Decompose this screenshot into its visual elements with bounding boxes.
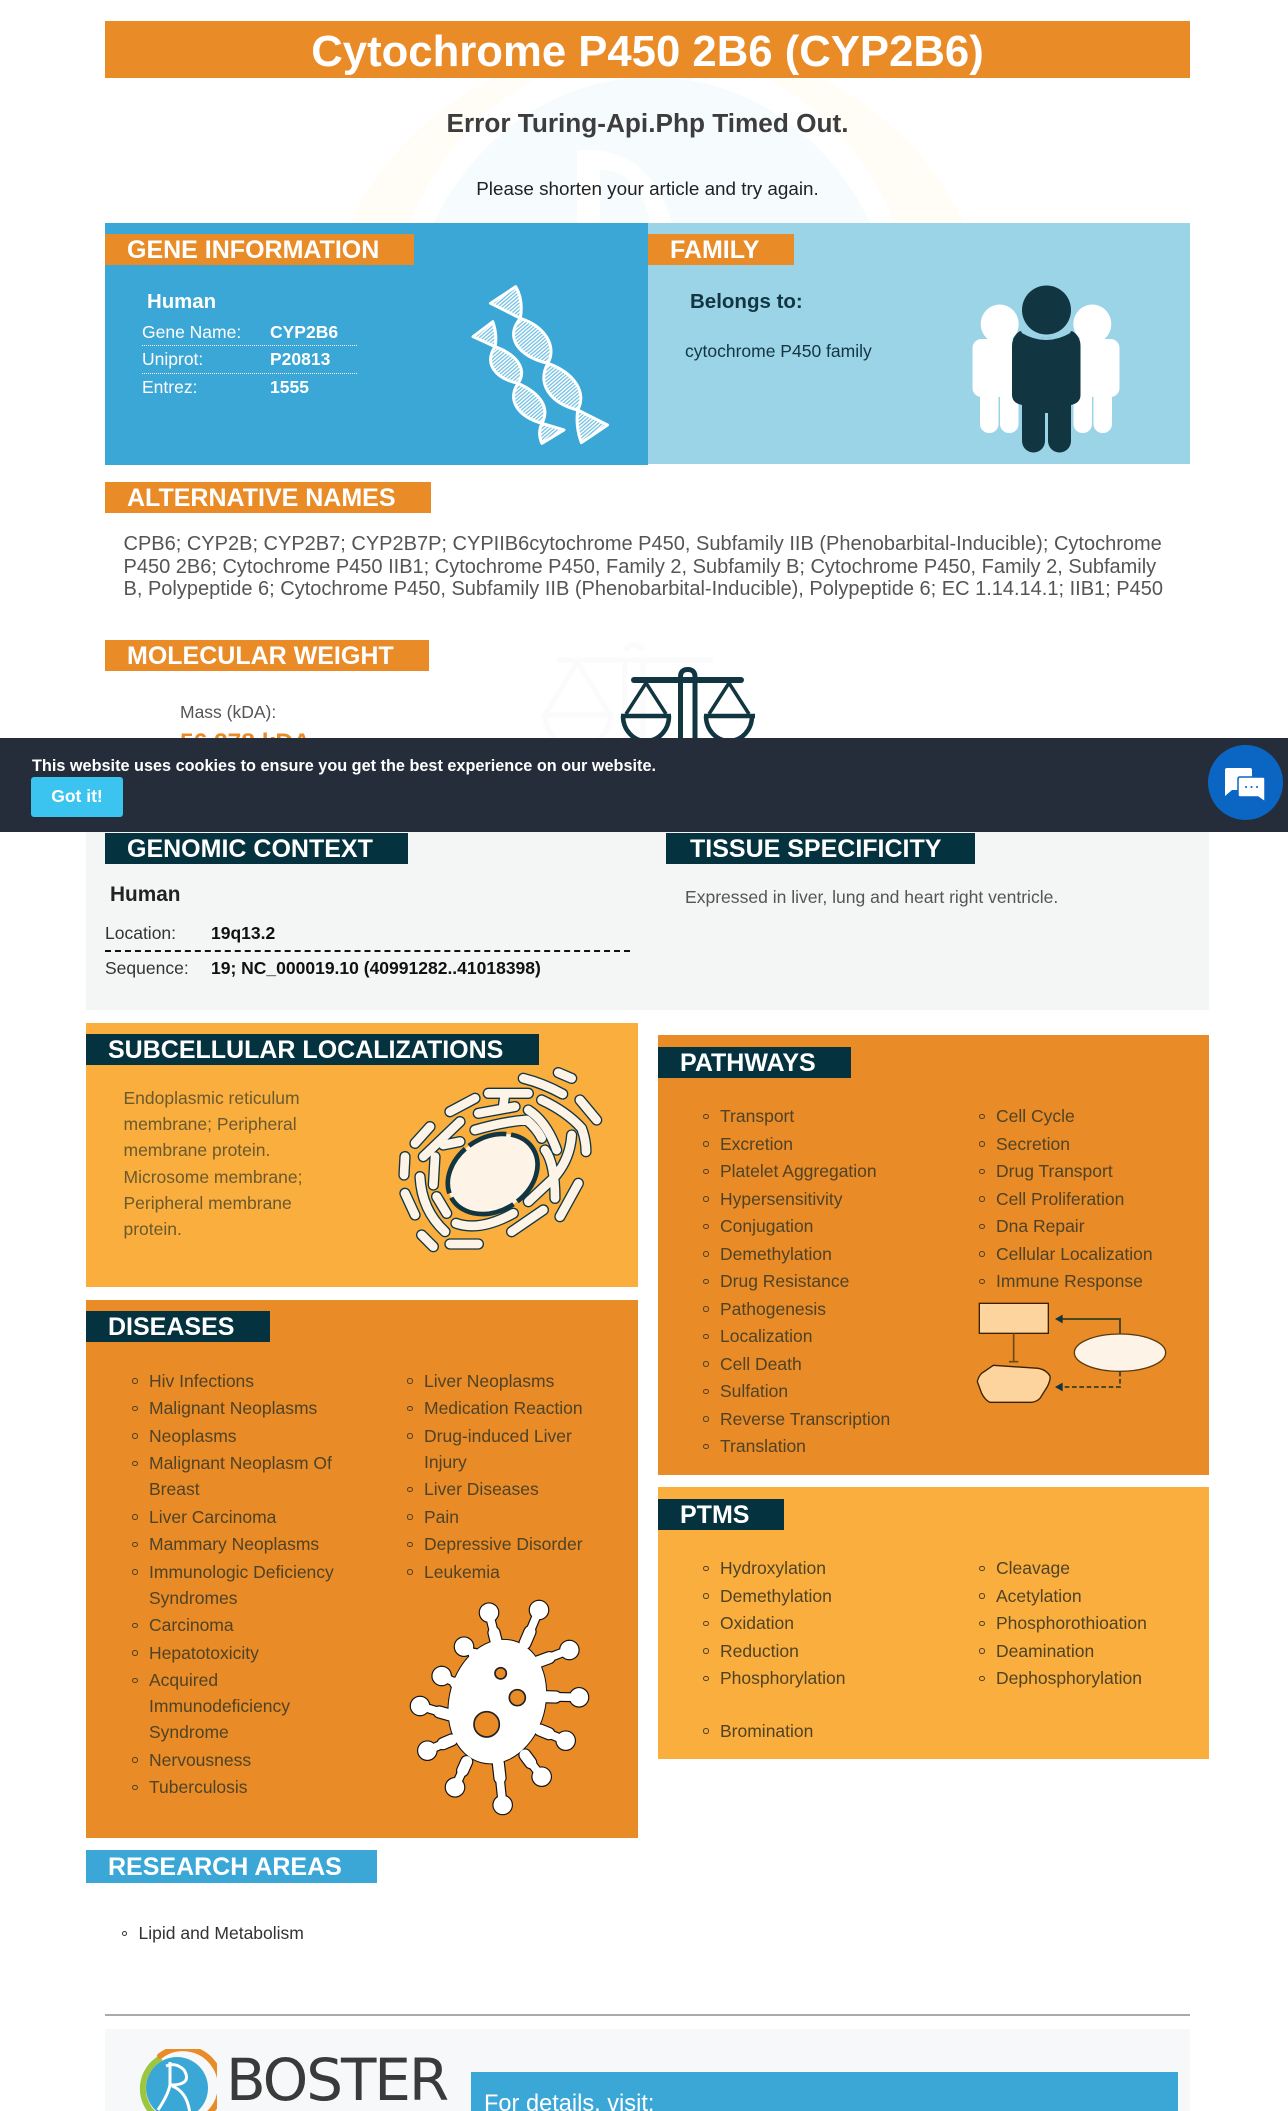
alternative names text — [124, 533, 1163, 600]
heading: research areas — [86, 1850, 377, 1883]
pathways list: column 1: Translation — [720, 1436, 806, 1456]
heading: gene information: GENE INFORMATION — [127, 236, 379, 264]
alternative names text: B, Polypeptide 6; Cytochrome P450, Subfamily IIB (Phenobarbital-Inducible), Polypeptide 6; EC 1.14.14.1; IIB1; P450 — [124, 578, 1163, 600]
disease list: column 1 — [132, 1370, 334, 1797]
gene data table: Uniprot: — [142, 349, 203, 369]
heading: research areas: RESEARCH AREAS — [108, 1853, 342, 1881]
disease list: column 1: Hiv Infections — [149, 1370, 254, 1390]
PTMs list: column 1: Bromination — [720, 1720, 813, 1740]
mass label: Mass (kDA): — [180, 702, 276, 722]
PTMs list: column 2: Cleavage — [996, 1558, 1070, 1578]
localization text: membrane protein. — [124, 1140, 270, 1160]
icon: virus — [410, 1600, 590, 1816]
heading: molecular weight: MOLECULAR WEIGHT — [127, 642, 394, 670]
disease list: column 2: Pain — [424, 1506, 459, 1526]
PTMs list: column 1: Phosphorylation — [720, 1668, 846, 1688]
cookie message: This website uses cookies to ensure you get the best experience on our website. — [32, 757, 656, 775]
gene data table: Gene Name: — [142, 322, 241, 342]
icon: group of people — [972, 286, 1120, 452]
heading: alternative names: ALTERNATIVE NAMES — [127, 484, 396, 512]
localization text: protein. — [124, 1219, 182, 1239]
species label: Human — [110, 883, 180, 906]
family name: cytochrome P450 family — [685, 341, 872, 361]
icon: pathway diagram — [976, 1302, 1166, 1403]
pathways list: column 1: Transport — [720, 1106, 794, 1126]
PTMs list: column 1: Demethylation — [720, 1586, 832, 1606]
disease list: column 1: Nervousness — [149, 1750, 251, 1770]
pathways list: column 2: Dna Repair — [996, 1216, 1085, 1236]
disease list: column 1: Syndromes — [149, 1588, 238, 1608]
genomic location table — [105, 923, 630, 978]
localization text — [124, 1088, 302, 1239]
disease list: column 1: Malignant Neoplasm Of — [149, 1453, 332, 1473]
pathways list: column 2 — [979, 1106, 1153, 1291]
panel: diseases — [86, 1300, 638, 1838]
genomic location table: Sequence: — [105, 958, 189, 978]
icon: faint scale watermark — [540, 640, 730, 738]
pathways list: column 1: Reverse Transcription — [720, 1408, 890, 1428]
heading: diseases — [86, 1311, 270, 1342]
panel: genomic context and tissue specificity — [86, 832, 1209, 1010]
disease list: column 2 — [407, 1370, 583, 1582]
localization text: membrane; Peripheral — [124, 1114, 297, 1134]
genomic location table: 19; NC_000019.10 (40991282..41018398) — [211, 958, 541, 978]
gene data table — [142, 322, 357, 397]
disease list: column 1: Liver Carcinoma — [149, 1506, 276, 1526]
panel: footer — [105, 2029, 1190, 2111]
pathways list: column 1: Localization — [720, 1326, 812, 1346]
heading: family: FAMILY — [670, 236, 759, 264]
pathways list: column 1: Drug Resistance — [720, 1271, 849, 1291]
PTMs list: column 1: Reduction — [720, 1640, 799, 1660]
PTMs list: column 2: Dephosphorylation — [996, 1668, 1142, 1688]
pathways list: column 2: Drug Transport — [996, 1161, 1113, 1181]
divider — [105, 2014, 1190, 2016]
icon: endoplasmic reticulum — [398, 1067, 602, 1252]
button: got it — [31, 777, 123, 816]
cookie consent bar — [0, 738, 1288, 832]
pathways list: column 1: Cell Death — [720, 1354, 802, 1374]
PTMs list: column 1: Hydroxylation — [720, 1558, 826, 1578]
icon: DNA helix — [472, 285, 610, 445]
pathways list: column 1: Platelet Aggregation — [720, 1161, 877, 1181]
disease list: column 1: Immunologic Deficiency — [149, 1562, 334, 1582]
heading: pathways: PATHWAYS — [680, 1049, 816, 1077]
PTMs list: column 1: Oxidation — [720, 1613, 794, 1633]
pathways list: column 1: Conjugation — [720, 1216, 813, 1236]
heading: PTMs — [658, 1499, 784, 1530]
title banner — [105, 21, 1190, 78]
alternative names text: CPB6; CYP2B; CYP2B7; CYP2B7P; CYPIIB6cytochrome P450, Subfamily IIB (Phenobarbital-Inducible); Cytochrome — [124, 533, 1162, 555]
panel: gene information — [105, 223, 648, 465]
disease list: column 2: Leukemia — [424, 1562, 500, 1582]
panel: subcellular localizations — [86, 1023, 638, 1287]
PTMs list: column 2: Acetylation — [996, 1586, 1082, 1606]
pathways list: column 2: Cell Proliferation — [996, 1188, 1124, 1208]
title banner: Cytochrome P450 2B6 (CYP2B6) — [311, 27, 984, 76]
heading: subcellular localizations: SUBCELLULAR LOCALIZATIONS — [108, 1036, 503, 1064]
icon: balance scale — [620, 667, 755, 738]
PTMs list: column 2: Phosphorothioation — [996, 1613, 1147, 1633]
heading: PTMs: PTMS — [680, 1501, 749, 1529]
panel: pathways — [658, 1035, 1209, 1475]
disease list: column 2: Injury — [424, 1452, 467, 1472]
disease list: column 1: Tuberculosis — [149, 1777, 248, 1797]
button: got it: Got it! — [51, 786, 103, 806]
disease list: column 1: Syndrome — [149, 1722, 229, 1742]
localization text: Endoplasmic reticulum — [124, 1088, 300, 1108]
call to action box — [471, 2072, 1178, 2111]
pathways list: column 2: Immune Response — [996, 1271, 1143, 1291]
genomic location table: 19q13.2 — [211, 923, 275, 943]
disease list: column 2: Medication Reaction — [424, 1398, 583, 1418]
icon: chat button — [1208, 745, 1283, 820]
logo mark — [140, 2049, 217, 2111]
alternative names text: P450 2B6; Cytochrome P450 IIB1; Cytochrome P450, Family 2, Subfamily B; Cytochrome P450, Family 2, Subfamily — [124, 556, 1156, 578]
error message: Please shorten your article and try again. — [476, 178, 819, 199]
disease list: column 2: Drug-induced Liver — [424, 1426, 572, 1446]
pathways list: column 2: Secretion — [996, 1134, 1070, 1154]
background watermark logo — [350, 78, 964, 223]
disease list: column 1: Carcinoma — [149, 1615, 234, 1635]
error heading: Error Turing-Api.Php Timed Out. — [446, 108, 849, 138]
species label: Human — [147, 291, 216, 313]
disease list: column 1: Breast — [149, 1479, 200, 1499]
localization text: Peripheral membrane — [124, 1193, 292, 1213]
heading: family — [648, 234, 794, 265]
disease list: column 2: Liver Neoplasms — [424, 1370, 554, 1390]
tissue specificity text: Expressed in liver, lung and heart right ventricle. — [685, 887, 1058, 907]
heading: genomic context: GENOMIC CONTEXT — [127, 835, 373, 863]
gene data table: P20813 — [270, 349, 330, 369]
pathways list: column 2: Cell Cycle — [996, 1106, 1075, 1126]
pathways list: column 1: Pathogenesis — [720, 1298, 826, 1318]
disease list: column 1: Hepatotoxicity — [149, 1642, 259, 1662]
PTMs list: column 2 — [979, 1558, 1147, 1688]
logo: Boster — [140, 2049, 448, 2111]
gene data table: Entrez: — [142, 377, 197, 397]
heading: tissue specificity: TISSUE SPECIFICITY — [690, 835, 941, 863]
PTMs list: column 1 — [703, 1558, 846, 1740]
PTMs list: column 2: Deamination — [996, 1640, 1094, 1660]
gene data table: 1555 — [270, 377, 309, 397]
pathways list: column 1: Excretion — [720, 1134, 793, 1154]
pathways list: column 1: Hypersensitivity — [720, 1188, 843, 1208]
disease list: column 1: Mammary Neoplasms — [149, 1534, 319, 1554]
heading: pathways — [658, 1047, 851, 1078]
research areas list: Lipid and Metabolism — [138, 1923, 304, 1943]
localization text: Microsome membrane; — [124, 1167, 302, 1187]
disease list: column 1: Acquired — [149, 1670, 218, 1690]
disease list: column 1: Malignant Neoplasms — [149, 1398, 317, 1418]
genomic location table: Location: — [105, 923, 176, 943]
panel: PTMs — [658, 1487, 1209, 1758]
disease list: column 2: Depressive Disorder — [424, 1534, 583, 1554]
belongs to label: Belongs to: — [690, 290, 803, 313]
pathways list: column 1: Demethylation — [720, 1244, 832, 1264]
disease list: column 1: Neoplasms — [149, 1426, 237, 1446]
pathways list: column 1 — [703, 1106, 890, 1456]
mass value: 56.278 kDA — [180, 729, 311, 756]
panel: family — [648, 223, 1190, 464]
disease list: column 2: Liver Diseases — [424, 1479, 539, 1499]
disease list: column 1: Immunodeficiency — [149, 1696, 290, 1716]
pathways list: column 2: Cellular Localization — [996, 1244, 1153, 1264]
heading: diseases: DISEASES — [108, 1313, 234, 1341]
gene data table: CYP2B6 — [270, 322, 338, 342]
pathways list: column 1: Sulfation — [720, 1381, 788, 1401]
